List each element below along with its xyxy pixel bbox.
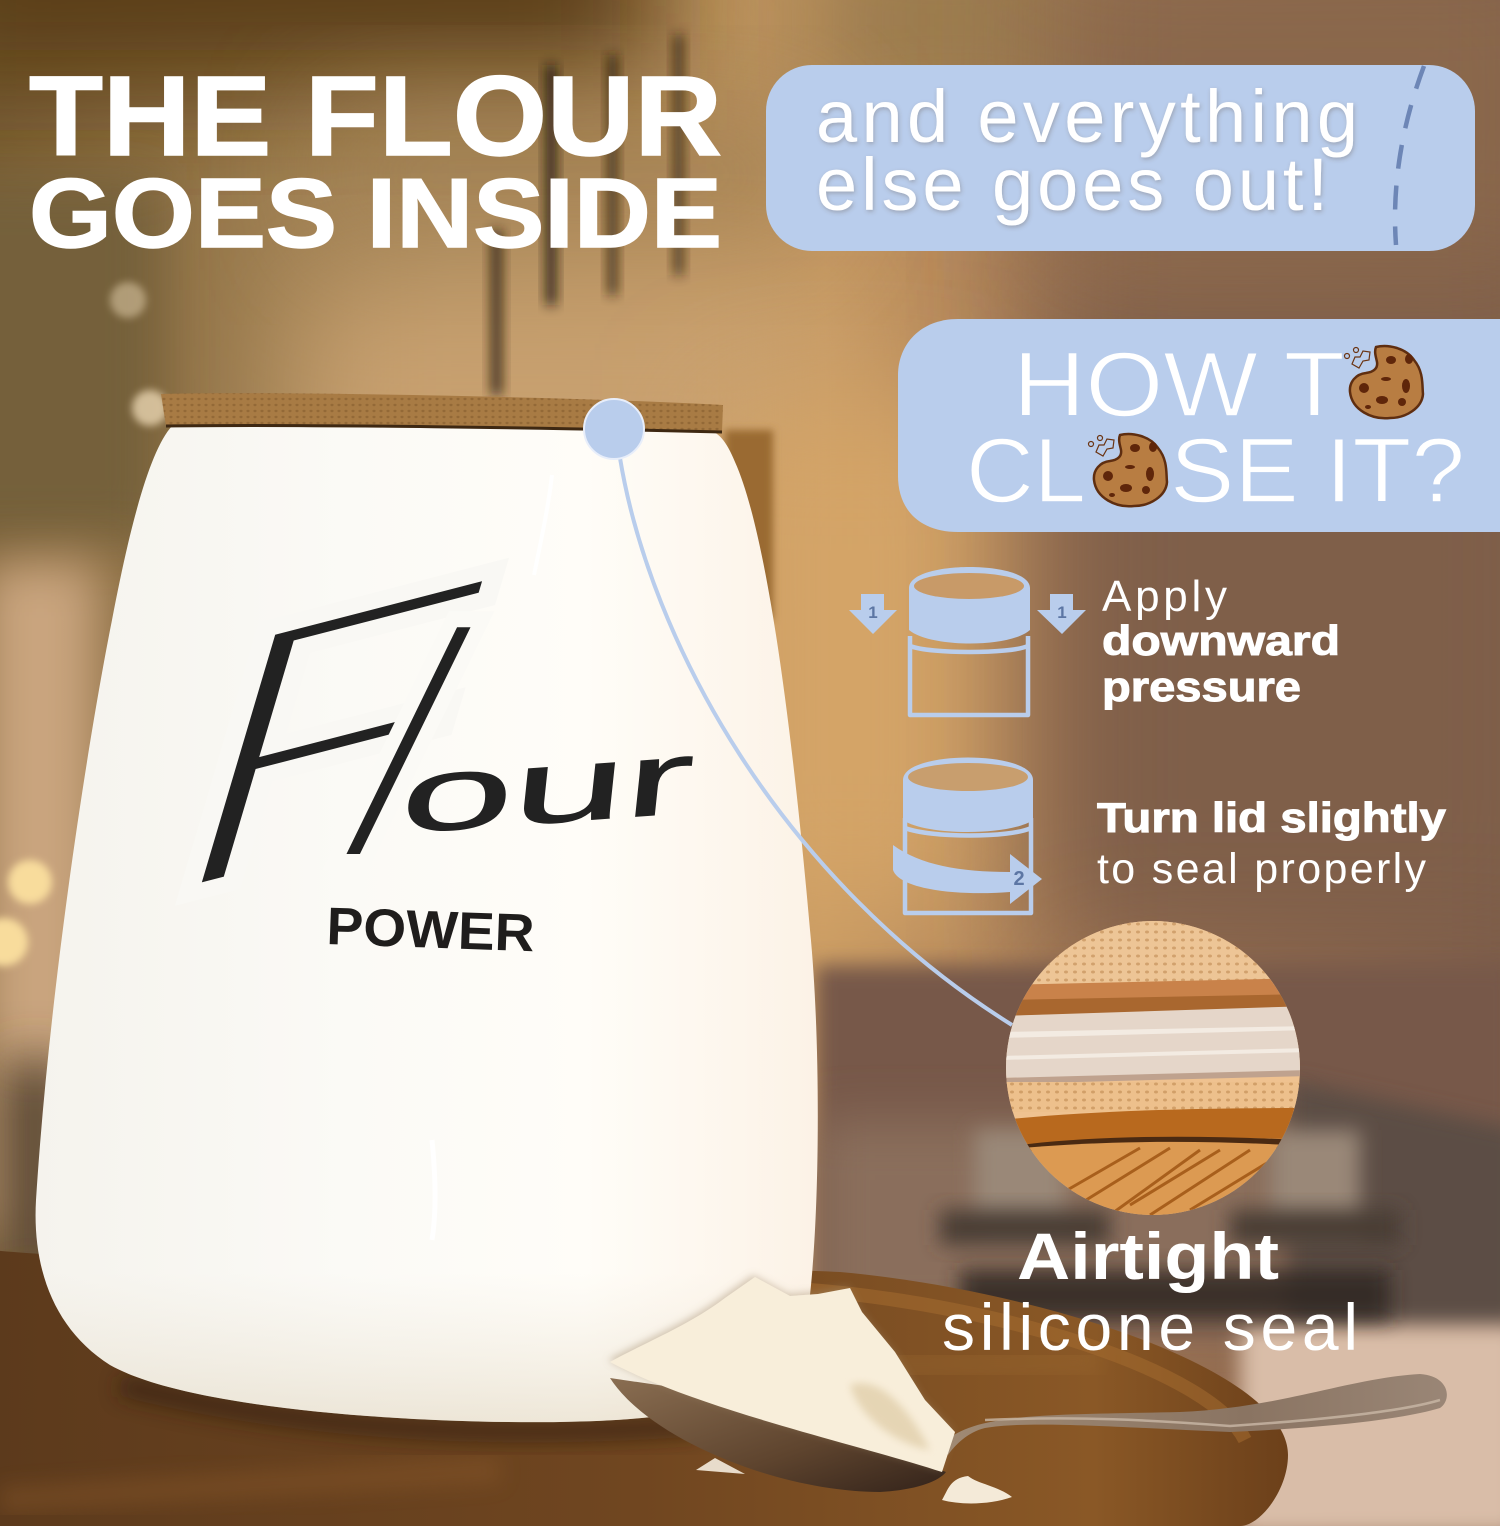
arrow 1 left: 1 xyxy=(868,603,878,622)
text: apply downward pressure: downward xyxy=(1102,617,1340,664)
heading line 2 right: SE IT? xyxy=(1170,420,1465,522)
panel text: else goes out! xyxy=(816,143,1328,226)
heading line 2 left: CL xyxy=(966,420,1086,522)
text: turn lid slightly to seal properly: to seal properly xyxy=(1097,845,1426,893)
wordmark: Flour: F xyxy=(126,482,539,986)
icon: jar with downward arrows xyxy=(849,567,1086,715)
caption: airtight silicone seal: silicone seal xyxy=(942,1290,1358,1364)
dashed seal curve xyxy=(1395,66,1424,245)
panel: and everything else goes out xyxy=(766,65,1475,251)
arrow 1 right: 1 xyxy=(1057,603,1067,622)
title xyxy=(29,53,722,268)
detail circle: silicone seal close-up xyxy=(1006,921,1300,1215)
text: turn lid slightly to seal properly: Turn lid slightly xyxy=(1097,794,1447,841)
flour pile xyxy=(610,1277,955,1472)
arrow 2: 2 xyxy=(1013,868,1025,890)
text: apply downward pressure: pressure xyxy=(1102,663,1301,710)
panel: how to close it xyxy=(898,319,1500,532)
wordmark: Flour: l xyxy=(277,559,534,934)
caption: airtight silicone seal xyxy=(942,1219,1358,1364)
text: turn lid slightly to seal properly xyxy=(1097,794,1447,893)
spoon with flour xyxy=(610,1277,1447,1503)
icon: cookie bottom xyxy=(1088,434,1167,506)
icon: jar with turning arrow xyxy=(893,758,1042,913)
arrow 1 right xyxy=(1037,594,1086,634)
title line 1: THE FLOUR xyxy=(29,53,722,179)
arrow 1 left xyxy=(849,594,897,634)
caption: airtight silicone seal: Airtight xyxy=(1017,1219,1279,1293)
title line 2: GOES INSIDE xyxy=(29,158,722,268)
wooden board xyxy=(0,1250,1288,1526)
panel text: and everything xyxy=(816,75,1358,158)
arrow 2 xyxy=(893,845,1042,904)
callout line xyxy=(620,458,1012,1025)
callout dot xyxy=(584,399,644,459)
heading line 1: HOW T xyxy=(1013,334,1345,436)
text: apply downward pressure xyxy=(1102,572,1340,710)
icon: cookie top xyxy=(1344,346,1423,418)
panel text xyxy=(816,75,1358,226)
wordmark: POWER: POWER xyxy=(326,897,536,963)
text: apply downward pressure: Apply xyxy=(1102,572,1227,621)
bamboo lid xyxy=(161,393,723,432)
wordmark: Flour: our xyxy=(396,718,699,856)
ceramic flour jar xyxy=(36,426,818,1422)
